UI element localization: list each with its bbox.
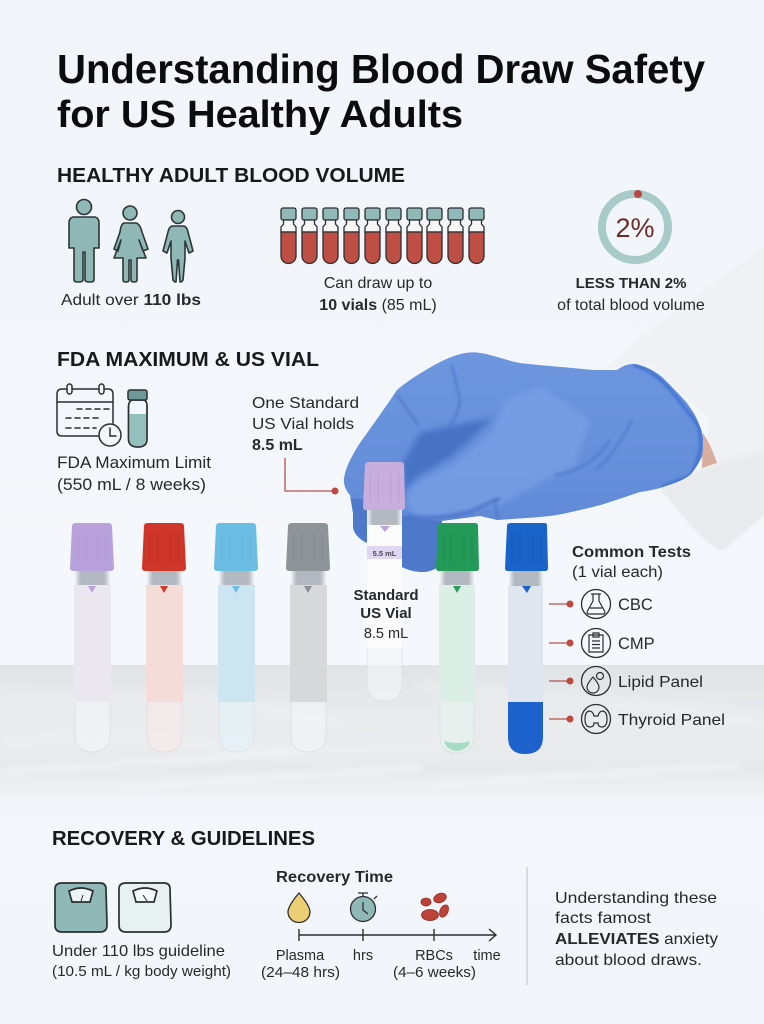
callout: one standard US vial (252, 395, 359, 494)
test row: CBC (549, 590, 653, 618)
text: FDA maximum limit: (550 mL / 8 weeks) (57, 476, 206, 494)
heading: FDA maximum and US vial: FDA MAXIMUM & US VIAL (57, 349, 319, 371)
lower fingers (350, 498, 445, 575)
text: can draw up to 10 vials (319, 275, 437, 314)
heading: recovery time: Recovery Time (276, 869, 393, 886)
icon: filled scale (55, 883, 107, 932)
vial: dark blue cap (505, 523, 548, 754)
icon: red blood cells (421, 892, 450, 920)
text: adult over 110 lbs: Adult over 110 lbs (61, 292, 201, 309)
timeline labels: time (473, 948, 501, 964)
text: common tests (572, 544, 691, 581)
icon: plasma drop (288, 893, 310, 923)
text: less than 2% (557, 275, 705, 314)
title: for US Healthy Adults (57, 94, 463, 136)
callout: one standard US vial: 8.5 mL (252, 437, 303, 454)
timeline labels: hrs (353, 948, 373, 964)
icon: small vial (128, 390, 147, 447)
label band: 5.5 mL (367, 546, 402, 559)
text: under 110 lbs guideline: Under 110 lbs guideline (52, 943, 225, 960)
text: common tests: (1 vial each) (572, 564, 663, 581)
thumb lower shadow (408, 498, 500, 518)
timeline labels (261, 948, 501, 981)
title (57, 46, 705, 136)
timeline labels: RBCs (415, 948, 453, 964)
callout: one standard US vial: One Standard (252, 395, 359, 412)
text: FDA maximum limit: FDA Maximum Limit (57, 454, 211, 472)
text: less than 2%: LESS THAN 2% (576, 275, 686, 292)
vial: lavender cap (70, 523, 114, 752)
closing statement (527, 867, 718, 985)
icon: light scale (119, 883, 171, 932)
timeline labels: (4–6 weeks) (393, 965, 476, 981)
test row: thyroid panel: Thyroid Panel (618, 712, 725, 729)
text: standard US vial: 8.5 mL (364, 626, 408, 642)
test row: thyroid panel (549, 704, 725, 734)
text: can draw up to 10 vials: Can draw up to (324, 275, 432, 292)
text: under 110 lbs guideline (52, 943, 231, 980)
vial: held standard vial (363, 462, 405, 701)
glove creases (397, 365, 632, 520)
test row: CBC: CBC (618, 596, 653, 614)
icon: ten blood vials (281, 208, 484, 264)
vial: red cap (142, 523, 186, 752)
text: standard US vial: US Vial (360, 605, 412, 622)
glove cuff (633, 365, 701, 487)
text: standard US vial (353, 587, 419, 642)
test row: lipid panel: Lipid Panel (618, 674, 703, 691)
icon: stopwatch (350, 893, 377, 922)
heading: recovery and guidelines: RECOVERY & GUIDELINES (52, 828, 315, 850)
vial: light blue cap (214, 523, 258, 752)
text: under 110 lbs guideline: (10.5 mL / kg body weight) (52, 964, 231, 980)
blue gloved hand (344, 352, 703, 575)
test row: lipid panel (549, 666, 703, 696)
test row: CMP (549, 628, 655, 658)
text: FDA maximum limit (57, 454, 211, 494)
title: Understanding Blood Draw Safety (57, 46, 705, 92)
closing statement: ALLEVIATES anxiety (555, 931, 718, 948)
test row: CMP: CMP (618, 635, 655, 653)
text: standard US vial: Standard (353, 587, 419, 604)
glove shading (350, 365, 701, 575)
timeline labels: Plasma (276, 948, 325, 964)
lab coat sleeve (607, 246, 764, 549)
icon: calendar with clock (57, 384, 121, 446)
closing statement: Understanding these (555, 890, 717, 907)
chart: recovery timeline (261, 892, 501, 981)
text: common tests: Common Tests (572, 544, 691, 561)
closing statement: about blood draws. (555, 952, 702, 969)
thumb and palm highlight (406, 385, 590, 517)
callout: one standard US vial: US Vial holds (252, 416, 354, 433)
chart: 2% donut: 2% (615, 213, 655, 243)
text: can draw up to 10 vials: 10 vials (85 mL) (319, 297, 437, 314)
label band: 5.5 mL: 5.5 mL (373, 549, 397, 558)
timeline labels: (24–48 hrs) (261, 965, 340, 981)
chart: 2% donut (602, 190, 668, 260)
timeline axis (299, 929, 496, 941)
vial: green cap (436, 523, 479, 753)
vial: gray cap (286, 523, 330, 752)
text: less than 2%: of total blood volume (557, 297, 705, 314)
marble table surface (0, 665, 764, 815)
closing statement: facts famost (555, 910, 652, 927)
icon: three adult figures (69, 200, 193, 282)
heading: healthy adult blood volume: HEALTHY ADULT BLOOD VOLUME (57, 165, 405, 187)
shadow between fingers and thumb (403, 418, 493, 490)
